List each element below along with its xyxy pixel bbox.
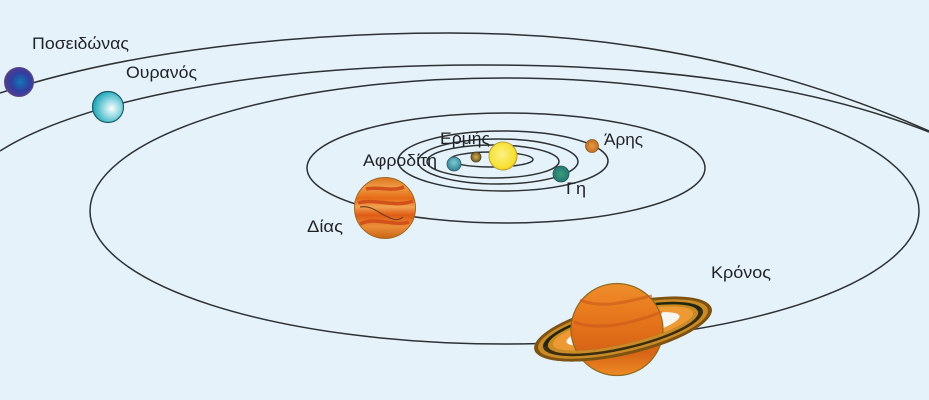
planet: Jupiter bbox=[354, 178, 416, 238]
orbit: Earth bbox=[418, 139, 578, 184]
orbit: Jupiter bbox=[307, 113, 705, 223]
planet: Earth bbox=[553, 166, 569, 182]
orbit: Mercury bbox=[450, 152, 533, 167]
Saturn ring back bbox=[528, 283, 718, 375]
label: Mars: Άρης bbox=[604, 130, 643, 149]
label: Venus: Αφροδίτη bbox=[363, 151, 437, 170]
orbit: Venus bbox=[427, 145, 559, 178]
sun bbox=[489, 142, 517, 170]
label: Mercury: Ερμής bbox=[440, 129, 490, 148]
planet: Mercury bbox=[471, 152, 481, 162]
orbit: Mars bbox=[398, 131, 608, 191]
planet: Mars bbox=[586, 140, 598, 152]
orbit: Neptune bbox=[0, 33, 929, 131]
Saturn globe bbox=[571, 284, 663, 376]
planet: Saturn bbox=[528, 283, 718, 376]
orbit: Saturn bbox=[90, 78, 919, 344]
label: Earth: Γη bbox=[566, 179, 586, 198]
orbit: Uranus bbox=[0, 65, 929, 151]
planet: Neptune bbox=[4, 68, 34, 96]
Saturn ring front bbox=[534, 308, 712, 362]
label: Jupiter: Δίας bbox=[307, 217, 343, 236]
label: Saturn: Κρόνος bbox=[711, 263, 771, 282]
label: Neptune: Ποσειδώνας bbox=[32, 34, 129, 53]
planet: Venus bbox=[447, 157, 461, 171]
label: Uranus: Ουρανός bbox=[126, 63, 197, 82]
planet: Uranus bbox=[92, 92, 124, 122]
